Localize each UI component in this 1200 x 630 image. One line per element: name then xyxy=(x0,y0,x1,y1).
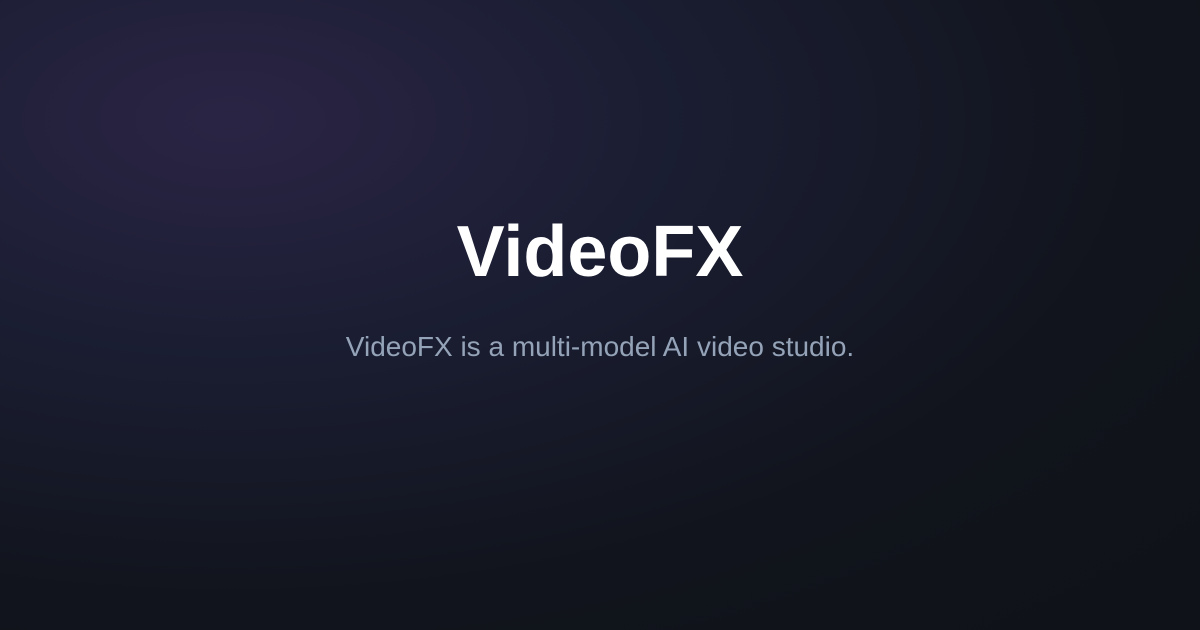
subtitle text: VideoFX is a multi-model AI video studio. xyxy=(346,331,854,362)
title: VideoFX xyxy=(457,212,743,292)
